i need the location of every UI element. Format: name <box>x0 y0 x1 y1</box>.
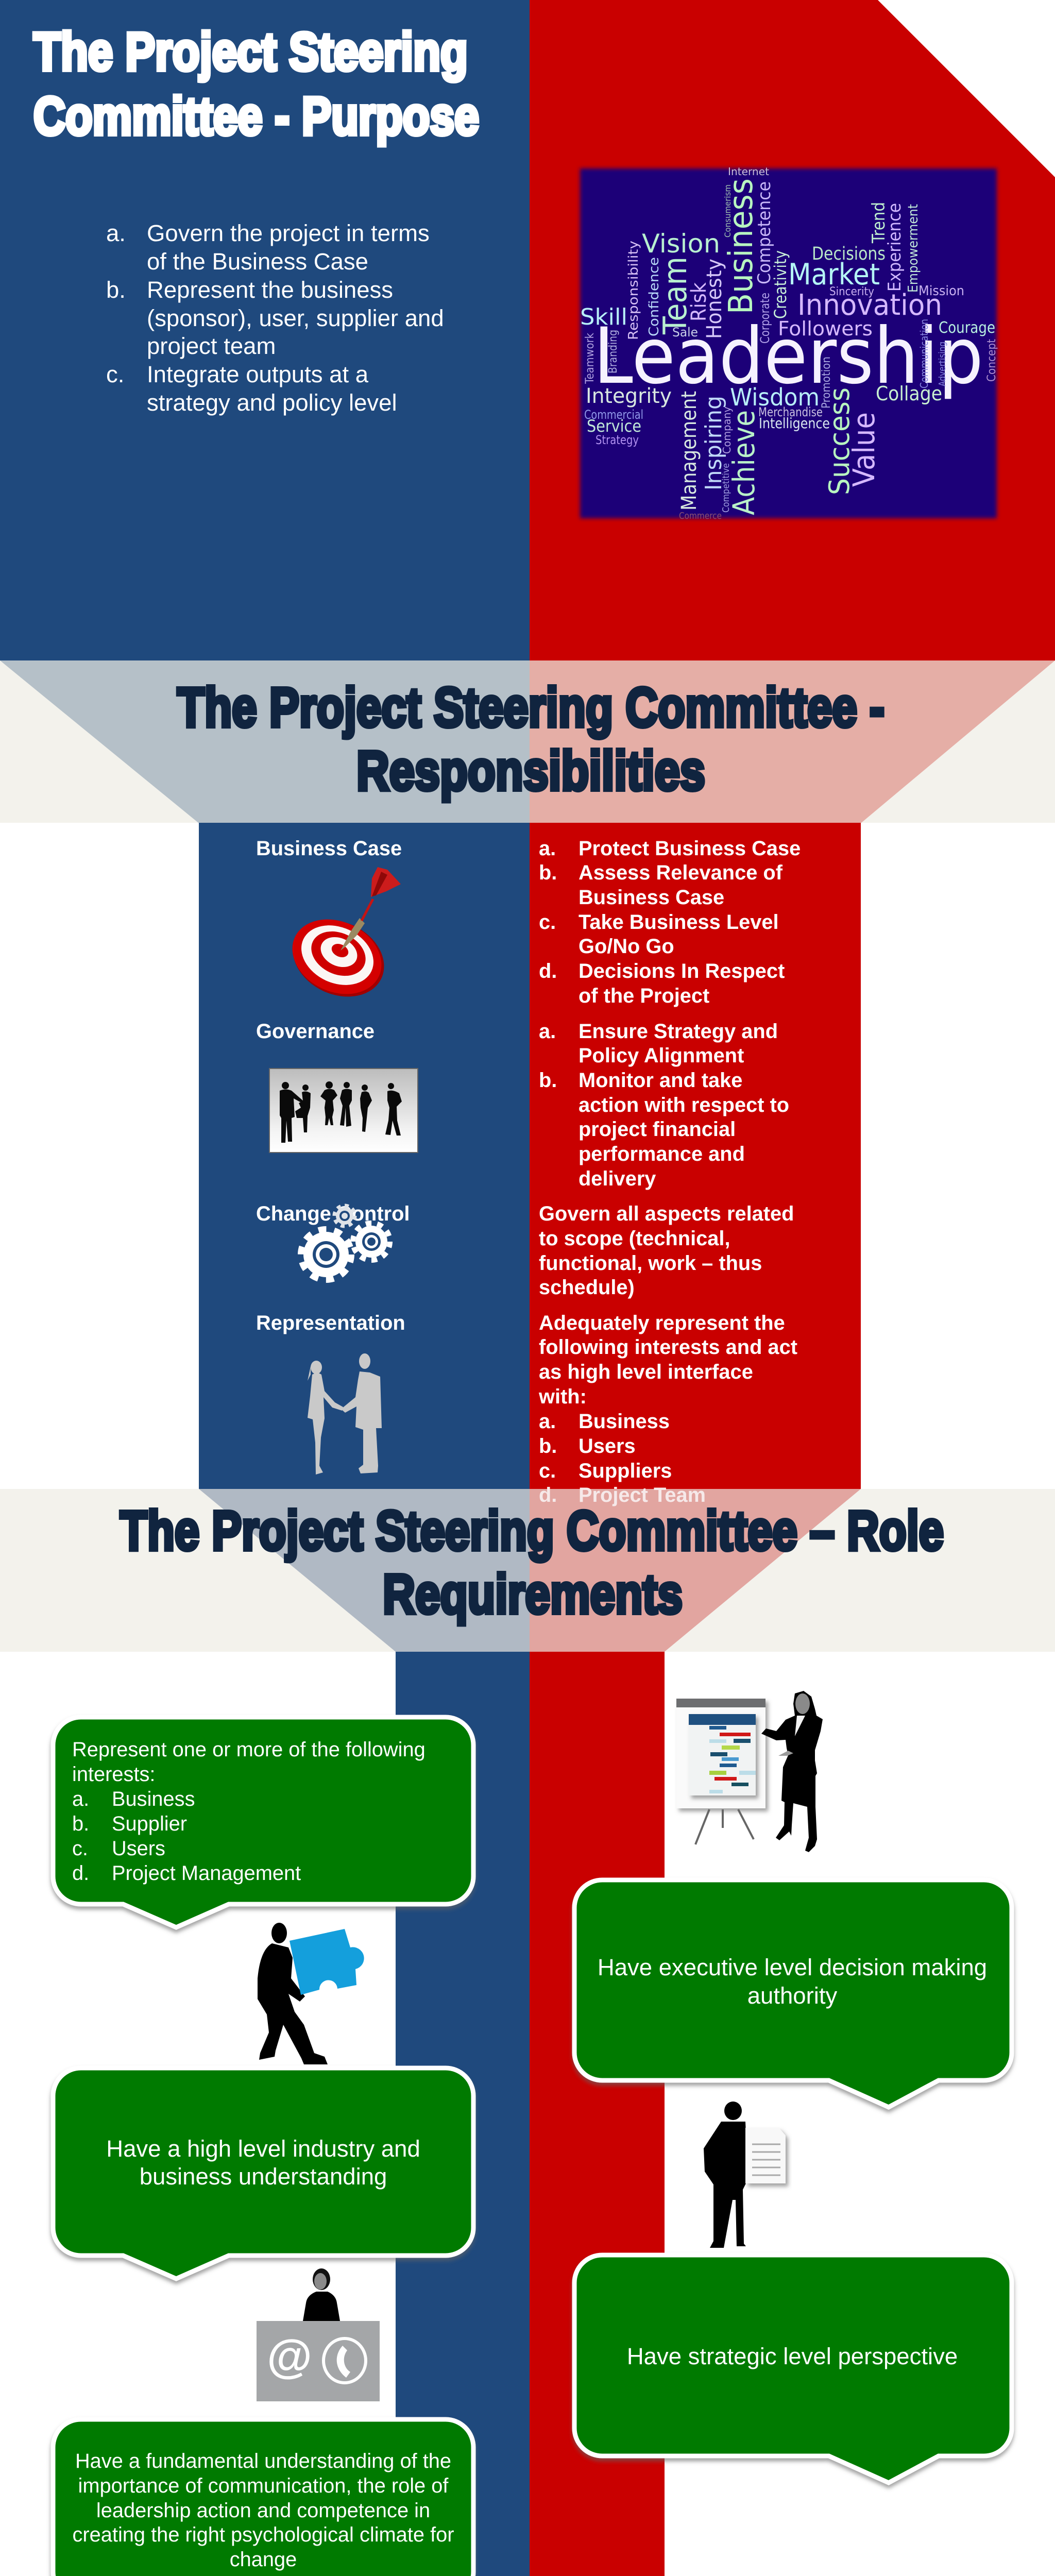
image: leadership word cloud: Commercial <box>584 408 643 422</box>
text: governance responsibilities: Ensure Strategy and <box>578 1020 778 1043</box>
column: red <box>530 823 861 1489</box>
text: business case responsibilities: Assess Relevance of <box>578 861 783 884</box>
text: business case responsibilities: of the Project <box>578 985 709 1007</box>
image: leadership word cloud: Advertising <box>937 342 948 386</box>
image: leadership word cloud: Innovation <box>797 289 942 322</box>
callout: represent interests: c. <box>72 1837 88 1860</box>
image: leadership word cloud: Intelligence <box>759 415 830 432</box>
image: leadership word cloud: Strategy <box>595 433 639 447</box>
callout: industry and business understanding: Have a high level industry and <box>106 2136 420 2162</box>
text: change control responsibilities: functional, work – thus <box>539 1252 762 1275</box>
callout: industry and business understanding <box>53 2068 473 2279</box>
image: leadership word cloud: Empowerment <box>906 204 921 293</box>
image: leadership word cloud: Branding <box>607 330 620 374</box>
image: leadership word cloud: Teamwork <box>584 333 597 384</box>
title: purpose: Committee - Purpose <box>33 87 479 146</box>
image: leadership word cloud: Wisdom <box>730 383 820 411</box>
text: business case responsibilities: Business Case <box>578 886 724 909</box>
text: business case responsibilities <box>539 837 801 1007</box>
text: business case responsibilities: Decisions In Respect <box>578 960 785 982</box>
callout: represent interests: a. <box>72 1788 89 1810</box>
text: governance responsibilities: delivery <box>578 1167 656 1190</box>
image: leadership word cloud: Trend <box>869 202 889 244</box>
image: leadership word cloud: Mission <box>918 283 964 299</box>
text: governance responsibilities: action with respect to <box>578 1094 789 1116</box>
text: business case responsibilities: a. <box>539 837 556 860</box>
illustration: woman with email and phone sign: @ <box>267 2331 312 2382</box>
callout: represent interests: Users <box>112 1837 165 1860</box>
text: governance responsibilities: project financial <box>578 1118 736 1141</box>
text: governance responsibilities: b. <box>539 1069 557 1092</box>
text: representation responsibilities: Adequately represent the <box>539 1312 785 1334</box>
callout: represent interests <box>53 1717 473 1927</box>
image: leadership word cloud: Corporate <box>758 293 772 344</box>
panel: role requirements <box>53 1652 1012 2576</box>
row labels: Business Case <box>256 837 402 860</box>
image: leadership word cloud: Sincerity <box>829 285 874 298</box>
callout: fundamental understanding of communication: leadership action and competence in <box>96 2499 430 2522</box>
image: leadership word cloud: Team <box>656 257 694 335</box>
callout: fundamental understanding of communication <box>53 2419 473 2576</box>
image: leadership word cloud: Achieve <box>726 410 761 515</box>
callout: decision making authority <box>574 1880 1012 2107</box>
callout: represent interests: Represent one or more of the following <box>72 1738 426 1761</box>
text: change control responsibilities: to scope (technical, <box>539 1227 730 1250</box>
callout: represent interests: Business <box>112 1788 195 1810</box>
image: leadership word cloud: Company <box>721 406 733 454</box>
heading: role requirements <box>120 1499 944 1625</box>
image: leadership word cloud: Commerce <box>679 511 722 521</box>
text: governance responsibilities: Policy Alignment <box>578 1044 744 1067</box>
image: leadership word cloud: Success <box>823 387 856 495</box>
text: governance responsibilities: performance and <box>578 1143 745 1165</box>
callout: represent interests: d. <box>72 1862 89 1885</box>
panel: responsibilities <box>0 660 1055 1652</box>
image: leadership word cloud: Creativity <box>771 250 790 319</box>
illustration: man carrying puzzle piece <box>258 1923 364 2064</box>
image: leadership word cloud: Business <box>722 178 760 314</box>
blue half <box>0 0 530 660</box>
illustration: presenter with gantt chart <box>676 1691 823 1852</box>
panel: purpose <box>0 0 1055 660</box>
image: leadership word cloud: Sale <box>672 325 698 340</box>
red half <box>530 0 1055 660</box>
image: leadership word cloud: Service <box>587 416 641 436</box>
centre strip blue <box>396 1652 530 2576</box>
title: purpose: The Project Steering <box>33 22 468 82</box>
heading: responsibilities: Responsibilities <box>356 739 705 802</box>
white corner cut <box>878 0 1055 177</box>
image: business people silhouettes <box>269 1069 418 1153</box>
row labels <box>256 837 410 1334</box>
callout: represent interests: Supplier <box>112 1812 187 1835</box>
callout: fundamental understanding of communication: creating the right psychological climate for <box>72 2523 454 2546</box>
text: governance responsibilities: Monitor and take <box>578 1069 742 1092</box>
illustration: man holding document <box>704 2102 786 2248</box>
text: business case responsibilities: Protect Business Case <box>578 837 801 860</box>
purpose list: project team <box>147 333 276 359</box>
icon: dart and target <box>280 867 401 1011</box>
list item spilling over banner: d. <box>539 1484 557 1506</box>
image: leadership word cloud: Honesty <box>703 259 726 339</box>
callout: decision making authority: authority <box>747 1982 838 2009</box>
image: leadership word cloud: Risk <box>687 282 711 321</box>
image: leadership word cloud: Vision <box>642 229 720 259</box>
purpose list: Govern the project in terms <box>147 220 430 246</box>
callout: strategic level perspective <box>574 2255 1012 2483</box>
image: leadership word cloud: Competence <box>754 181 775 284</box>
image: leadership word cloud: Concept <box>985 339 998 382</box>
text: representation responsibilities: following interests and act <box>539 1336 797 1359</box>
callout: fundamental understanding of communication: change <box>230 2548 297 2571</box>
callout: decision making authority: Have executive level decision making <box>598 1954 987 1980</box>
purpose list: c. <box>106 361 124 387</box>
image: leadership word cloud: Collage <box>876 382 942 405</box>
illustration: woman with email and phone sign <box>257 2268 380 2401</box>
image: leadership word cloud: Experience <box>884 203 905 292</box>
title: purpose <box>33 22 479 146</box>
banner: role requirements <box>0 1489 1055 1652</box>
text: representation responsibilities: Business <box>578 1410 670 1433</box>
text: change control responsibilities <box>539 1202 794 1299</box>
text: representation responsibilities: Users <box>578 1435 636 1458</box>
text: governance responsibilities <box>539 1020 789 1190</box>
purpose list: b. <box>106 277 126 303</box>
text: representation responsibilities: Suppliers <box>578 1460 672 1482</box>
callout: industry and business understanding: business understanding <box>140 2163 387 2190</box>
text: representation responsibilities: with: <box>538 1385 587 1408</box>
text: representation responsibilities <box>538 1312 797 1482</box>
callout: represent interests: Project Management <box>112 1862 301 1885</box>
column: blue <box>199 823 530 1489</box>
image: leadership word cloud: Inspiring <box>701 396 727 490</box>
image: leadership word cloud: Competitive <box>721 463 731 513</box>
text: representation responsibilities: b. <box>539 1435 557 1458</box>
callout: represent interests: b. <box>72 1812 89 1835</box>
purpose list: strategy and policy level <box>147 389 397 416</box>
image: leadership word cloud: Internet <box>728 165 769 178</box>
purpose list: (sponsor), user, supplier and <box>147 305 444 331</box>
image: leadership word cloud: Communication <box>918 319 930 388</box>
heading: responsibilities: The Project Steering Committee - <box>177 676 884 738</box>
callout: represent interests: interests: <box>72 1763 155 1786</box>
text: representation responsibilities: a. <box>539 1410 556 1433</box>
text: business case responsibilities: c. <box>539 911 556 934</box>
purpose list: of the Business Case <box>147 248 368 275</box>
text: business case responsibilities: b. <box>539 861 557 884</box>
banner: responsibilities <box>0 660 1055 823</box>
image: leadership word cloud: Promotion <box>820 357 833 409</box>
image: leadership word cloud: Market <box>788 258 880 292</box>
text: governance responsibilities: a. <box>539 1020 556 1043</box>
text: business case responsibilities: Take Business Level <box>578 911 779 934</box>
centre strip red <box>530 1652 665 2576</box>
image: leadership word cloud: Skill <box>580 304 627 330</box>
text: business case responsibilities: Go/No Go <box>578 935 674 958</box>
row labels: Representation <box>256 1312 405 1334</box>
image: leadership word cloud: Followers <box>778 317 873 340</box>
heading: role requirements: Requirements <box>383 1563 683 1625</box>
image: leadership word cloud: Consumerism <box>723 184 733 238</box>
image: leadership word cloud: Management <box>677 391 701 511</box>
purpose list: Integrate outputs at a <box>147 361 369 387</box>
row labels: Change Control <box>256 1202 410 1225</box>
image: leadership word cloud: Responsibility <box>626 241 641 340</box>
row labels: Governance <box>256 1020 375 1043</box>
image: leadership word cloud: Leadership <box>593 312 983 401</box>
icon: gears <box>301 1206 390 1280</box>
text: representation responsibilities: as high level interface <box>539 1361 753 1383</box>
image: leadership word cloud <box>580 165 998 521</box>
callout: strategic level perspective: Have strategic level perspective <box>627 2343 958 2369</box>
image: leadership word cloud: Value <box>846 412 881 487</box>
list item spilling over banner: Project Team <box>578 1484 706 1506</box>
image: leadership word cloud: Merchandise <box>758 405 823 419</box>
image: leadership word cloud: Decisions <box>812 244 886 264</box>
callout: fundamental understanding of communication: importance of communication, the role of <box>78 2475 449 2497</box>
purpose list: Represent the business <box>147 277 393 303</box>
purpose list: a. <box>106 220 126 246</box>
text: change control responsibilities: schedule) <box>539 1276 635 1299</box>
heading: responsibilities <box>177 676 884 802</box>
icon: handshake silhouettes <box>308 1353 382 1475</box>
image: leadership word cloud: Courage <box>939 319 995 337</box>
text: representation responsibilities: c. <box>539 1460 556 1482</box>
purpose list <box>106 220 444 416</box>
text: business case responsibilities: d. <box>539 960 557 982</box>
callout: fundamental understanding of communication: Have a fundamental understanding of the <box>75 2450 451 2472</box>
image: leadership word cloud: Confidence <box>646 257 662 336</box>
image: leadership word cloud: Integrity <box>586 384 672 408</box>
text: change control responsibilities: Govern all aspects related <box>539 1202 794 1225</box>
